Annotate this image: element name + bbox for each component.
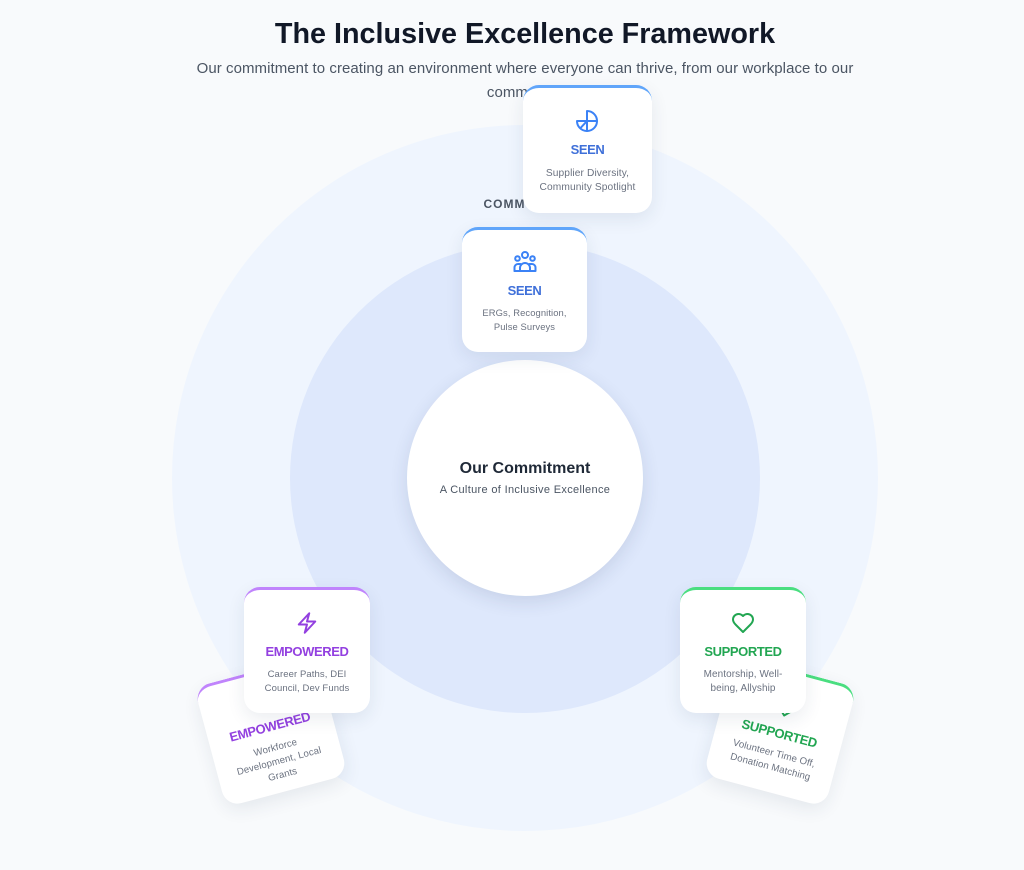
description: Development, Local	[236, 745, 323, 778]
description: Volunteer Time Off,	[732, 737, 816, 770]
description: Grants	[267, 766, 298, 784]
card: workplace seen	[462, 227, 587, 352]
card: workplace empowered	[244, 587, 370, 713]
inner ring: workplace	[290, 243, 760, 713]
description	[540, 168, 636, 193]
description: Supplier Diversity,	[546, 168, 629, 179]
heading: EMPOWERED	[265, 644, 349, 659]
description	[704, 669, 782, 694]
description: ERGs, Recognition,	[482, 307, 567, 318]
description: Council, Dev Funds	[265, 683, 349, 694]
icon: heart partly hidden	[782, 712, 792, 717]
icon: heart	[732, 613, 754, 633]
heading: EMPOWERED	[228, 709, 312, 745]
description	[265, 669, 349, 694]
outer ring: community	[172, 125, 878, 831]
card: community seen	[523, 85, 652, 213]
card: workplace supported	[680, 587, 806, 713]
heading: SUPPORTED	[704, 644, 782, 659]
card: community supported	[703, 655, 857, 807]
description: Donation Matching	[729, 751, 812, 783]
heading: SUPPORTED	[740, 716, 819, 751]
subtitle	[197, 60, 854, 101]
description	[482, 307, 567, 332]
card: community empowered	[194, 655, 348, 807]
center circle	[407, 360, 643, 596]
description: Workforce	[253, 737, 298, 759]
description: being, Allyship	[710, 683, 776, 694]
description: Career Paths, DEI	[268, 669, 346, 680]
icon: pie chart	[576, 110, 598, 132]
subtitle: community.	[487, 84, 563, 101]
description	[729, 737, 816, 783]
description: Community Spotlight	[540, 182, 635, 193]
subtitle: Our commitment to creating an environment where everyone can thrive, from our workplace to our	[197, 60, 853, 77]
heading: SEEN	[508, 283, 541, 298]
icon: people	[514, 251, 536, 272]
center subheading: A Culture of Inclusive Excellence	[440, 484, 610, 496]
heading: SEEN	[571, 142, 604, 157]
description: Pulse Surveys	[494, 320, 555, 332]
center heading: Our Commitment	[460, 460, 590, 477]
community label: COMMUNITY	[484, 197, 566, 211]
icon: lightning bolt	[298, 612, 316, 634]
description: Mentorship, Well-	[704, 669, 782, 680]
title: The Inclusive Excellence Framework	[275, 18, 775, 50]
